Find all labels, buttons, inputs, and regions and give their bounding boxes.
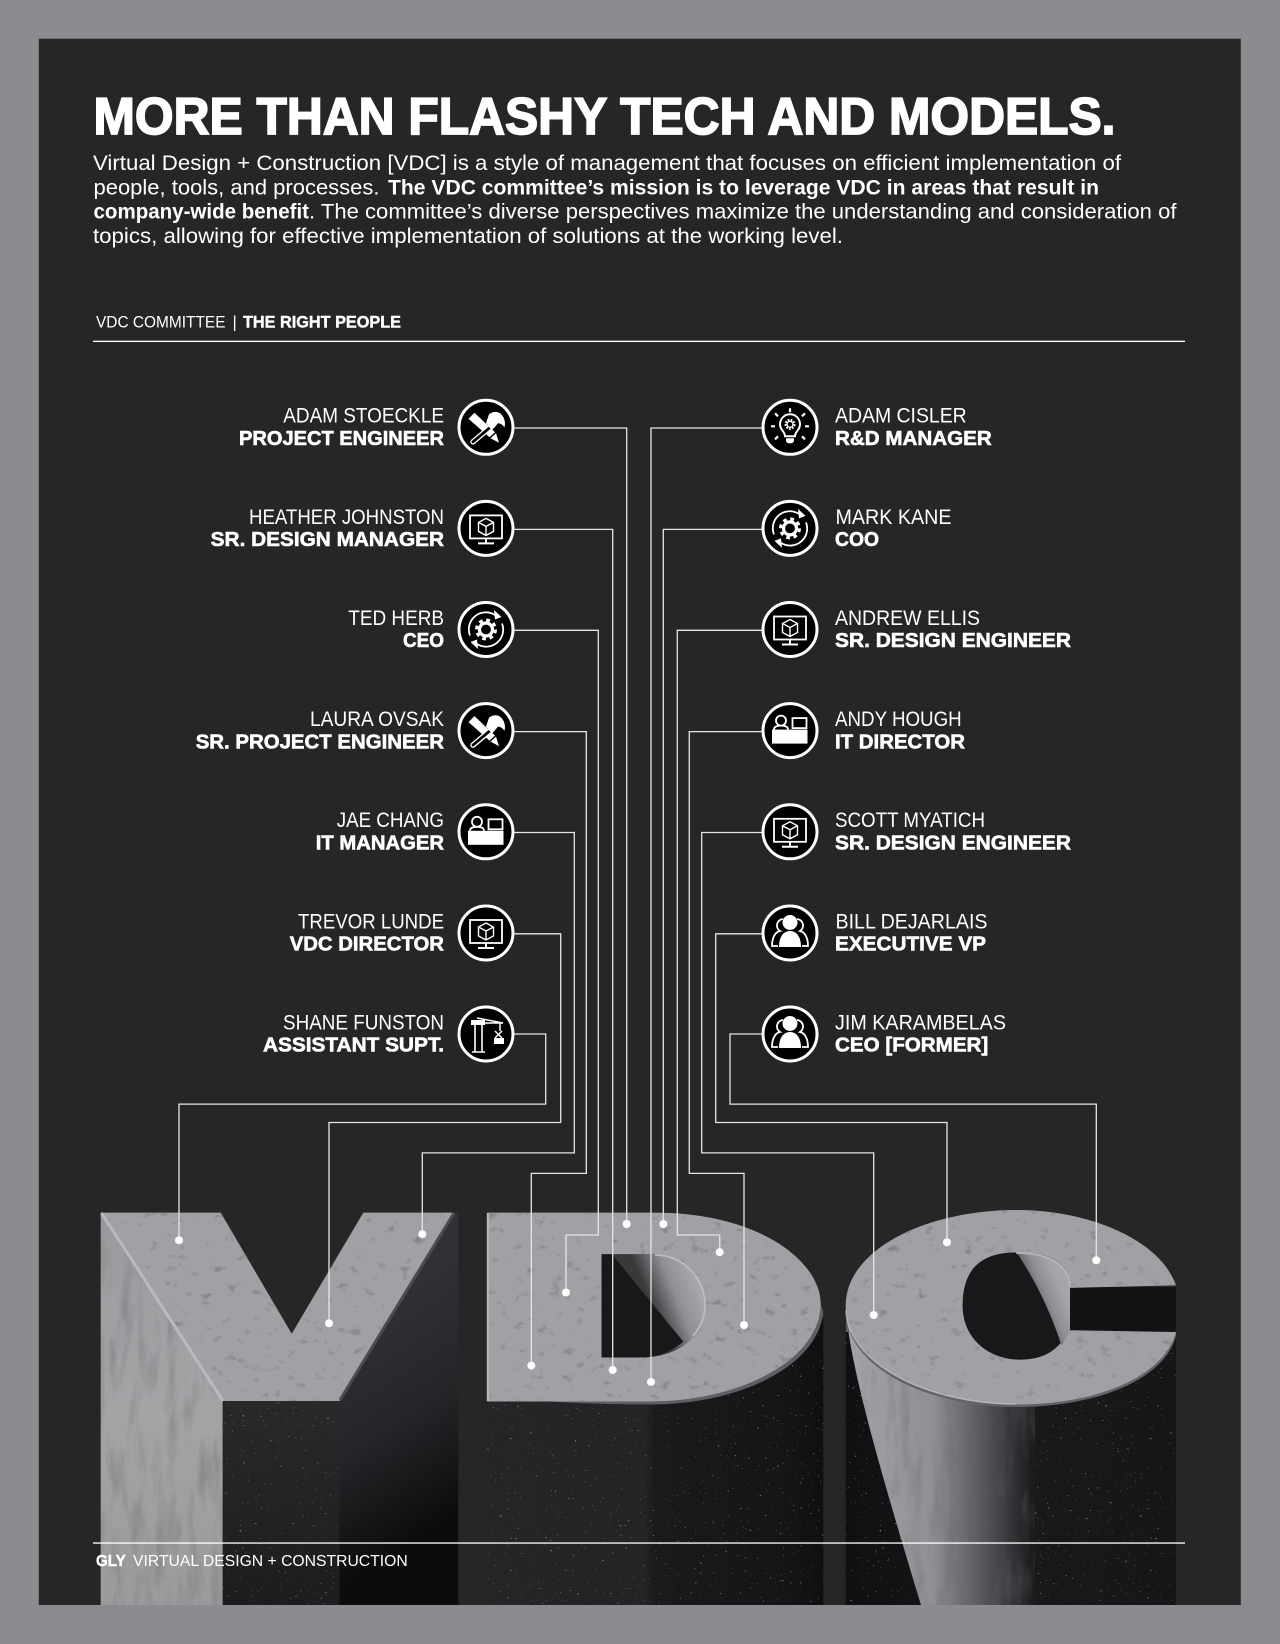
connectors: right column — [647, 428, 1100, 1386]
section heading — [96, 314, 401, 332]
person: Bill Dejarlais: BILL DEJARLAIS — [836, 910, 988, 933]
person: Laura Ovsak: SR. PROJECT ENGINEER — [196, 730, 444, 753]
person: Shane Funston: ASSISTANT SUPT. — [263, 1034, 444, 1057]
person: Ted Herb: CEO — [403, 629, 444, 652]
connectors: left column — [175, 428, 631, 1374]
person: Jae Chang: JAE CHANG — [337, 809, 444, 832]
section heading: | — [232, 314, 237, 332]
person: Mark Kane: COO — [835, 528, 879, 551]
person: Shane Funston — [263, 1007, 513, 1061]
person: Scott Myatich — [763, 805, 1071, 859]
intro text block: . The committee’s diverse perspectives maximize the understanding and consideration of — [309, 200, 1177, 224]
person: Adam Cisler: ADAM CISLER — [835, 405, 967, 428]
title: MORE THAN FLASHY TECH AND MODELS. — [94, 88, 1116, 146]
person: Laura Ovsak: LAURA OVSAK — [310, 708, 444, 731]
person: Heather Johnston: HEATHER JOHNSTON — [249, 506, 444, 529]
person: Scott Myatich: SCOTT MYATICH — [835, 809, 985, 832]
person: Jim Karambelas: CEO [FORMER] — [835, 1034, 988, 1057]
person: Laura Ovsak — [196, 704, 513, 758]
person: Andy Hough — [763, 704, 965, 758]
footer: VIRTUAL DESIGN + CONSTRUCTION — [133, 1553, 408, 1570]
person: Adam Cisler: R&D MANAGER — [835, 427, 992, 450]
person: Mark Kane: MARK KANE — [836, 506, 952, 529]
intro text block — [93, 151, 1177, 248]
person: Ted Herb: TED HERB — [348, 607, 444, 630]
intro text block: The VDC committee’s mission is to leverage VDC in areas that result in — [388, 175, 1099, 199]
intro text block: topics, allowing for effective implementation of solutions at the working level. — [93, 224, 843, 248]
person: Bill Dejarlais — [763, 906, 988, 960]
person: Scott Myatich: SR. DESIGN ENGINEER — [835, 832, 1071, 854]
person: Andrew Ellis: ANDREW ELLIS — [835, 607, 980, 630]
person: Jae Chang — [316, 805, 513, 859]
person: Andy Hough: IT DIRECTOR — [835, 730, 965, 753]
person: Trevor Lunde — [290, 906, 513, 960]
person: Heather Johnston — [211, 501, 513, 555]
section heading: THE RIGHT PEOPLE — [243, 314, 401, 332]
person: Bill Dejarlais: EXECUTIVE VP — [835, 933, 986, 956]
person: Adam Stoeckle — [239, 400, 513, 454]
footer: GLY — [96, 1553, 126, 1570]
person: Andy Hough: ANDY HOUGH — [835, 708, 962, 731]
person: Andrew Ellis — [763, 602, 1071, 656]
3D letter D — [487, 1213, 823, 1605]
person: Mark Kane — [763, 501, 952, 555]
person: Adam Stoeckle: PROJECT ENGINEER — [239, 427, 444, 450]
person: Jim Karambelas: JIM KARAMBELAS — [835, 1011, 1006, 1034]
person: Ted Herb — [348, 602, 513, 656]
intro text block: people, tools, and processes. — [94, 175, 379, 199]
intro text block: company-wide benefit — [94, 200, 309, 224]
person: Jim Karambelas — [763, 1007, 1006, 1061]
person: Trevor Lunde: VDC DIRECTOR — [290, 933, 444, 956]
person: Adam Cisler — [763, 400, 992, 454]
person: Adam Stoeckle: ADAM STOECKLE — [283, 405, 444, 428]
person: Jae Chang: IT MANAGER — [316, 832, 444, 854]
person: Shane Funston: SHANE FUNSTON — [283, 1011, 444, 1034]
person: Trevor Lunde: TREVOR LUNDE — [298, 910, 444, 933]
person: Heather Johnston: SR. DESIGN MANAGER — [211, 528, 444, 551]
intro text block: Virtual Design + Construction [VDC] is a style of management that focuses on efficient implementation of — [93, 151, 1121, 175]
person: Andrew Ellis: SR. DESIGN ENGINEER — [835, 629, 1071, 652]
3D letter C — [846, 1210, 1176, 1605]
section heading: VDC COMMITTEE — [96, 314, 226, 332]
3D letter V — [101, 1213, 458, 1605]
